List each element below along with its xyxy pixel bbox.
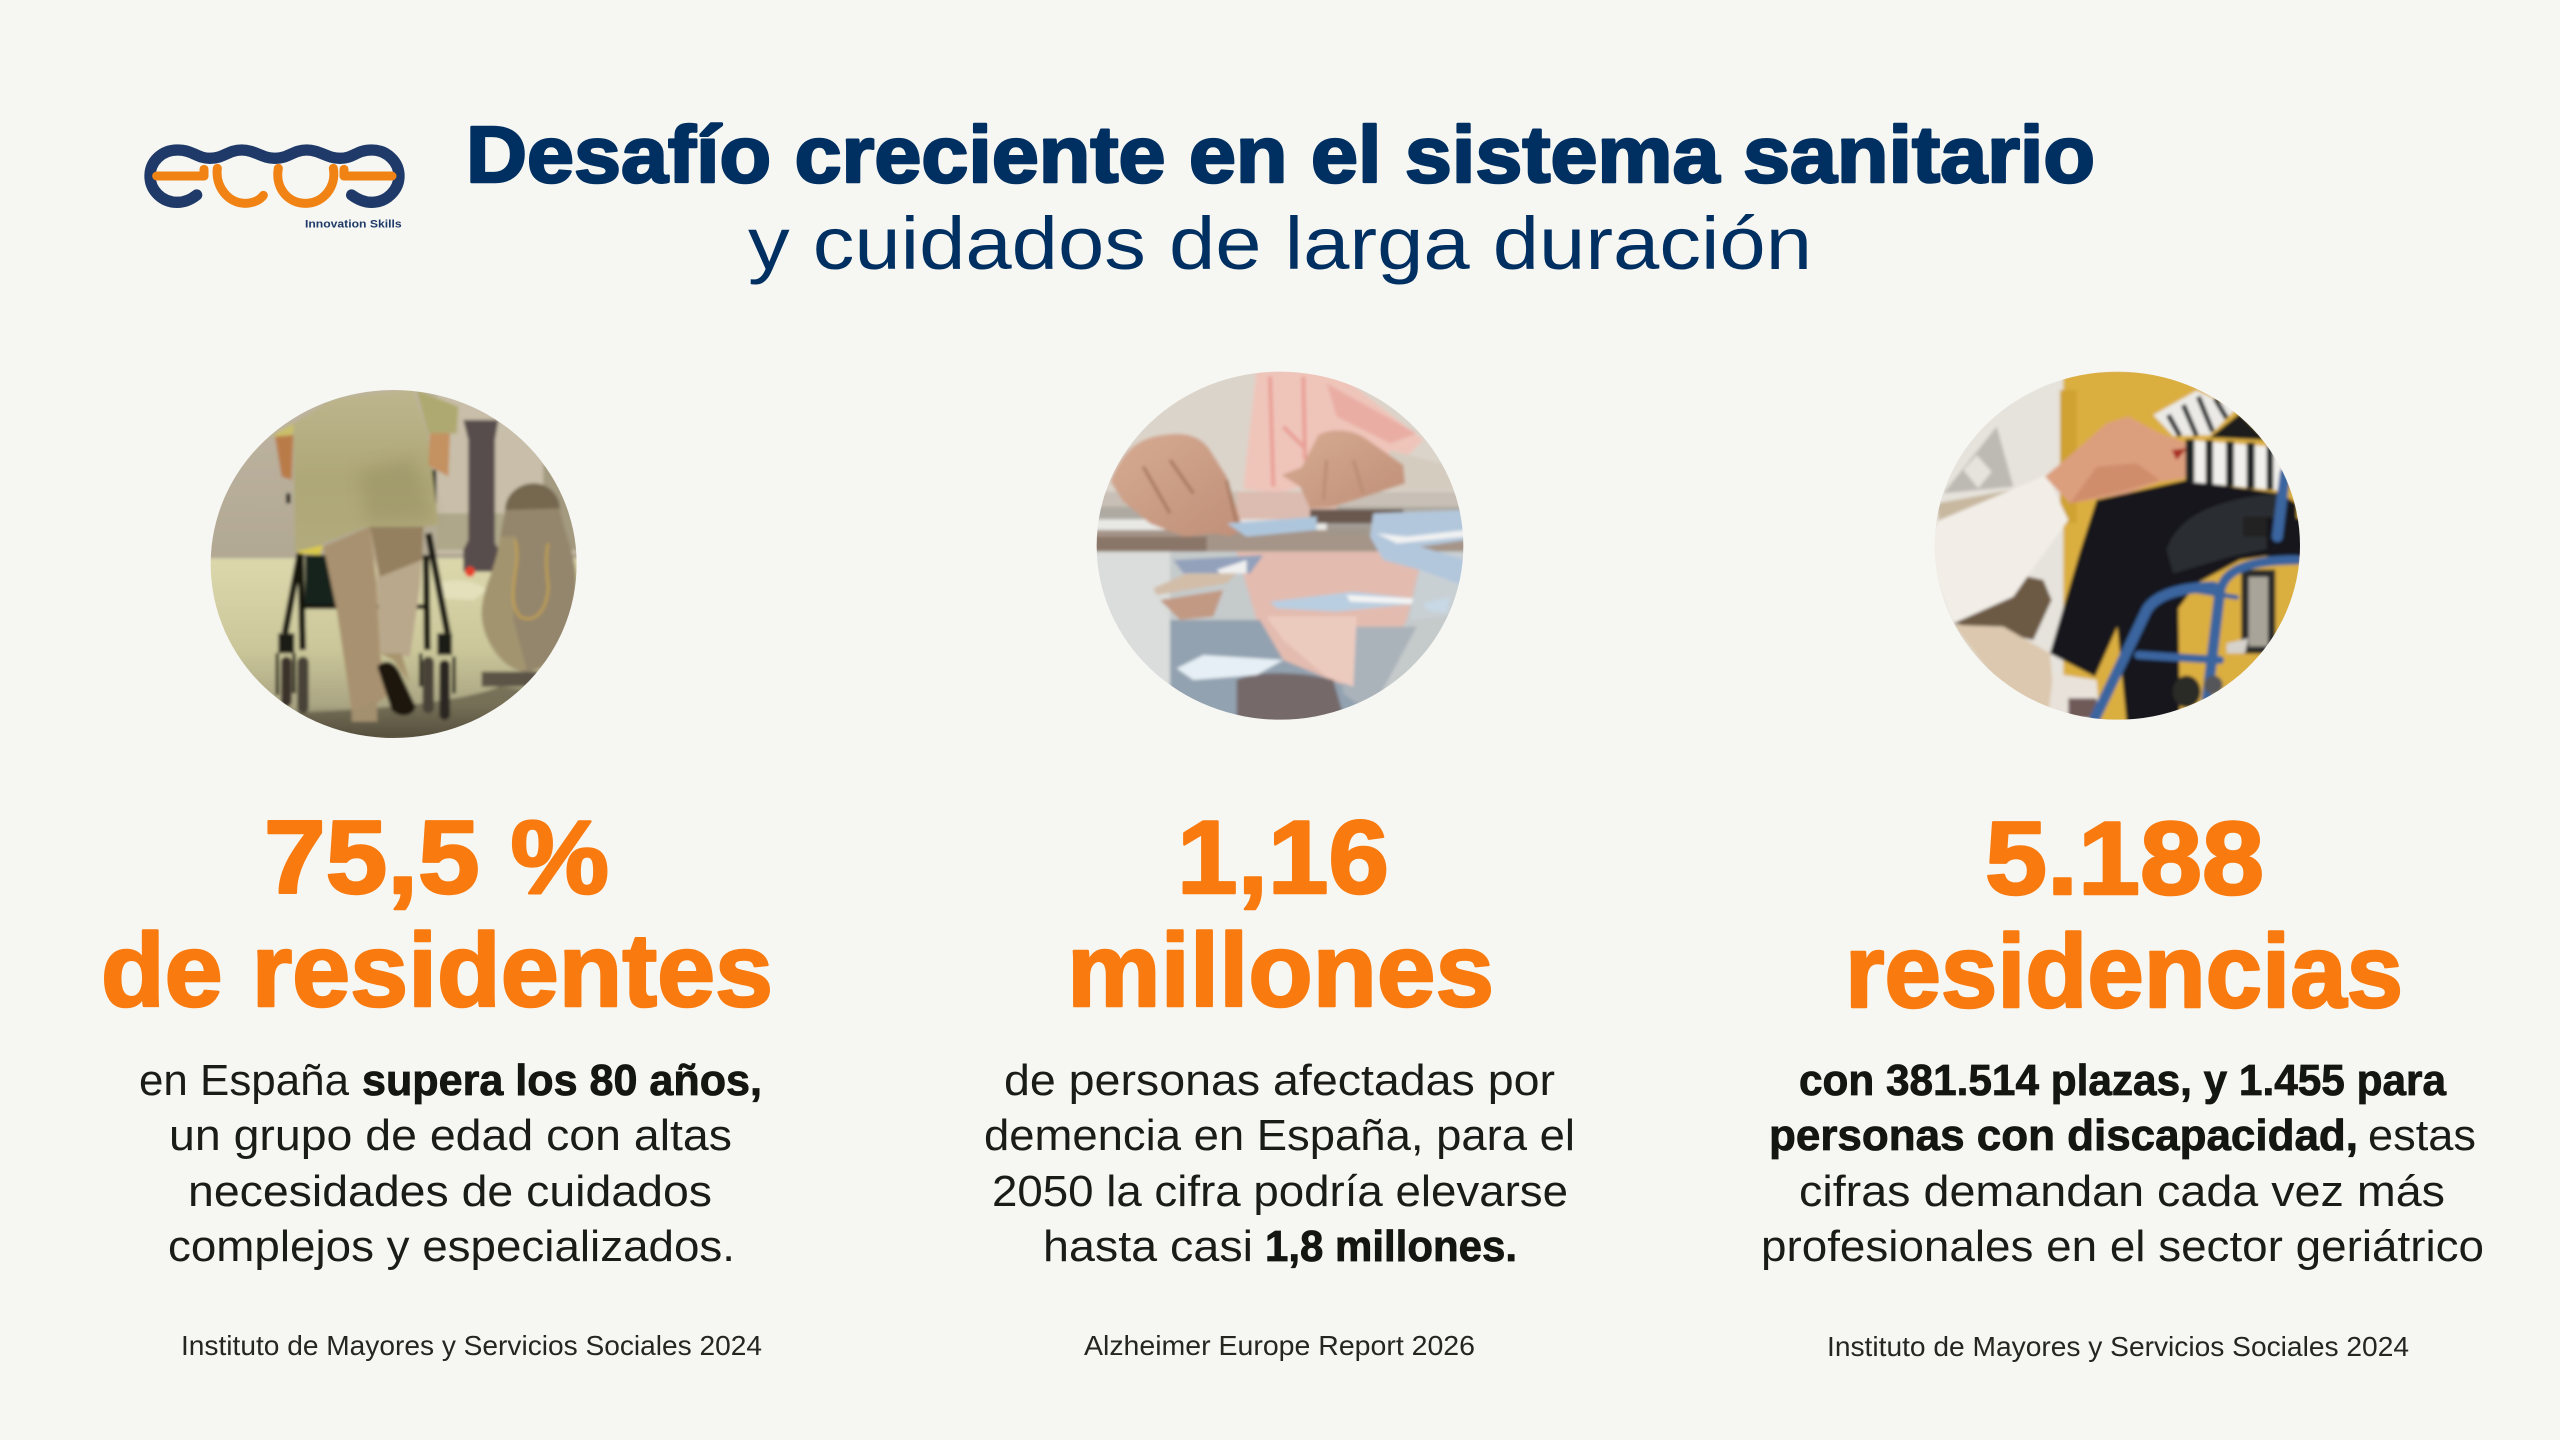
column 1: description: necesidades de cuidados <box>188 1167 712 1216</box>
column 3: stat: residencias <box>1845 914 2403 1030</box>
column 3: source: Instituto de Mayores y Servicios Sociales 2024 <box>1827 1331 2409 1362</box>
column 2: stat <box>1067 800 1494 1029</box>
column 1: stat <box>101 800 773 1029</box>
photo: hands assembling a puzzle <box>1096 372 1464 720</box>
column 3: description: profesionales en el sector geriátrico <box>1761 1222 2484 1271</box>
column 2: description: 2050 la cifra podría elevarse <box>992 1167 1568 1216</box>
column 3: stat <box>1845 801 2403 1030</box>
column 1: stat: de residentes <box>101 913 773 1029</box>
title: Desafío creciente en el sistema sanitario <box>466 110 2095 199</box>
column 3: description: personas con discapacidad, <box>1769 1111 2358 1160</box>
column 3: description: cifras demandan cada vez más <box>1799 1167 2445 1216</box>
photo: hands held beside a wheelchair <box>1934 372 2300 720</box>
column 3: description: estas <box>2368 1111 2476 1160</box>
column 1: description: supera los 80 años, <box>362 1056 762 1105</box>
column 2: description: 1,8 millones. <box>1265 1222 1517 1271</box>
column 3: description: con 381.514 plazas, y 1.455 para <box>1799 1056 2447 1105</box>
column 1: description: en España <box>139 1056 350 1105</box>
logo: ecos Innovation Skills <box>150 150 402 230</box>
photo: elderly person with walker <box>210 390 577 738</box>
column 2: description: demencia en España, para el <box>984 1111 1575 1160</box>
column 2: description <box>984 1056 1575 1271</box>
column 3: description <box>1761 1056 2484 1271</box>
column 2: source: Alzheimer Europe Report 2026 <box>1084 1330 1475 1361</box>
column 1: description: un grupo de edad con altas <box>169 1111 732 1160</box>
column 1: description <box>139 1056 762 1271</box>
logo: ecos Innovation Skills: Innovation Skills <box>305 218 402 230</box>
title <box>466 110 2095 285</box>
column 1: description: complejos y especializados. <box>168 1222 735 1271</box>
column 2: description: de personas afectadas por <box>1004 1056 1555 1105</box>
column 2: stat: millones <box>1067 913 1494 1029</box>
title: y cuidados de larga duración <box>748 202 1812 285</box>
column 1: stat: 75,5 % <box>264 800 609 916</box>
column 2: stat: 1,16 <box>1177 800 1389 916</box>
column 3: stat: 5.188 <box>1985 801 2264 917</box>
column 2: description: hasta casi <box>1043 1222 1253 1271</box>
column 1: source: Instituto de Mayores y Servicios Sociales 2024 <box>181 1330 762 1361</box>
